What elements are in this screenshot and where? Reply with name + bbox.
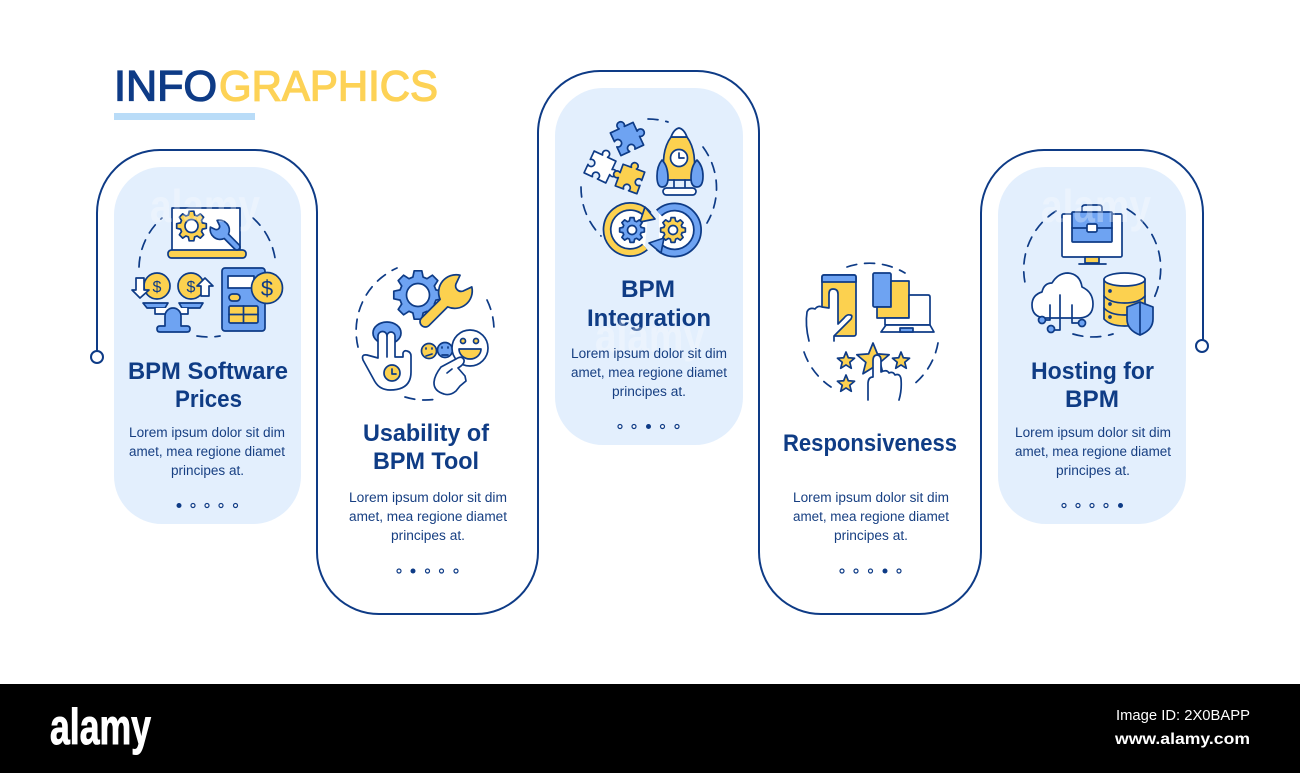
- text block: principes at.: [391, 528, 465, 543]
- text block: [1015, 425, 1171, 478]
- text block: [793, 490, 949, 543]
- heading: [128, 358, 288, 413]
- text block: Lorem ipsum dolor sit dim: [349, 490, 507, 505]
- footer bar: [0, 684, 1300, 773]
- footer image id: Image ID: 2X0BAPP: [1116, 708, 1250, 724]
- text block: Lorem ipsum dolor sit dim: [793, 490, 949, 505]
- heading: Integration: [587, 305, 711, 332]
- text block: amet, mea regione diamet: [571, 365, 727, 380]
- heading: Hosting for: [1031, 358, 1154, 385]
- text block: Lorem ipsum dolor sit dim: [129, 425, 285, 440]
- panel: card backgrounds: [114, 88, 1186, 524]
- title: INFO: [114, 62, 217, 110]
- panel: Hosting for BPM: [1015, 180, 1171, 508]
- heading: Usability of: [363, 420, 490, 447]
- text block: amet, mea regione diamet: [793, 509, 949, 524]
- watermark: alamy: [1041, 180, 1151, 232]
- pagination dots: [176, 503, 238, 508]
- panel: BPM Integration: [571, 114, 727, 429]
- heading: [1031, 358, 1154, 413]
- footer url: www.alamy.com: [1114, 731, 1250, 748]
- text block: principes at.: [171, 463, 244, 478]
- icon: puzzle, rocket and cycle gears: [581, 114, 717, 253]
- panel: BPM Software Prices: [128, 180, 288, 508]
- icon: laptop, scale and calculator: $: [153, 279, 162, 296]
- text block: [349, 490, 507, 543]
- text block: amet, mea regione diamet: [129, 444, 285, 459]
- icon: laptop, scale and calculator: $: [187, 279, 196, 296]
- text block: principes at.: [834, 528, 908, 543]
- text block: amet, mea regione diamet: [1015, 444, 1171, 459]
- title: [114, 62, 438, 120]
- text block: principes at.: [1056, 463, 1130, 478]
- icon: devices, hands and stars: [804, 263, 938, 400]
- heading: Prices: [175, 386, 242, 413]
- pagination dots: [840, 568, 901, 574]
- panel: Usability of BPM Tool: [349, 268, 507, 574]
- watermark: alamy: [150, 180, 260, 232]
- title: GRAPHICS: [219, 62, 438, 110]
- pagination dots: [397, 568, 458, 574]
- text block: amet, mea regione diamet: [349, 509, 507, 524]
- text block: [571, 346, 727, 399]
- panel: Responsiveness: [783, 263, 957, 574]
- pagination dots: [1062, 503, 1123, 508]
- icon: laptop, scale and calculator: $: [261, 276, 273, 301]
- heading: BPM Tool: [373, 448, 479, 475]
- heading: [587, 276, 711, 332]
- icon: gear, wrench, hand and faces: [356, 268, 494, 400]
- connecting outline: [91, 71, 1208, 614]
- heading: Responsiveness: [783, 430, 957, 457]
- text block: principes at.: [612, 384, 686, 399]
- heading: BPM Software: [128, 358, 288, 385]
- icon: laptop, scale and calculator: [132, 208, 282, 337]
- icon: monitor, cloud and database: [1024, 205, 1161, 337]
- heading: [363, 420, 490, 475]
- text block: Lorem ipsum dolor sit dim: [571, 346, 727, 361]
- pagination dots: [618, 424, 679, 429]
- heading: BPM: [621, 276, 675, 303]
- watermark: alamy: [595, 310, 705, 362]
- footer logo: alamy: [50, 699, 151, 755]
- text block: [129, 425, 285, 478]
- text block: Lorem ipsum dolor sit dim: [1015, 425, 1171, 440]
- heading: BPM: [1065, 386, 1119, 413]
